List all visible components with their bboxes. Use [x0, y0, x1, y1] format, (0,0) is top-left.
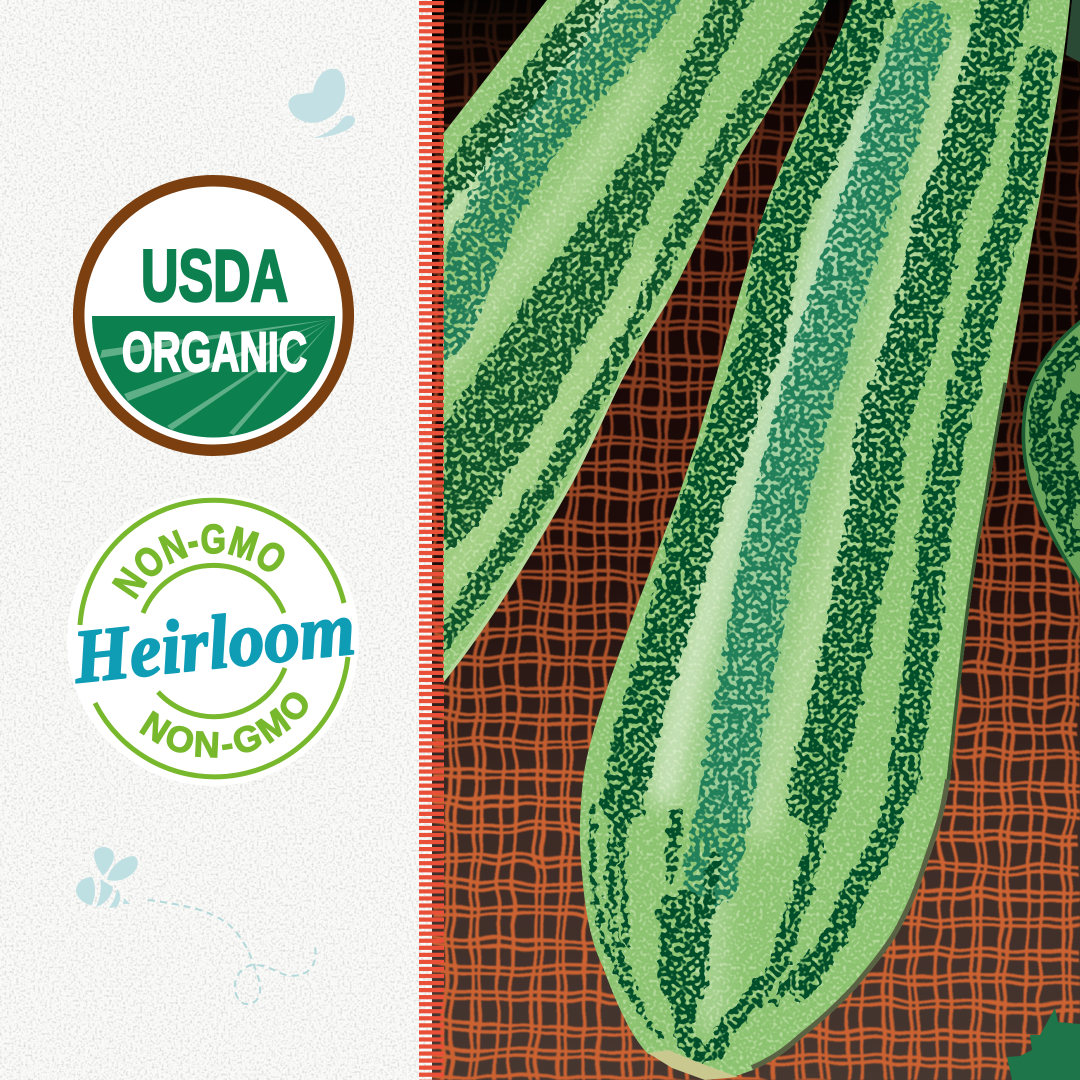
thin left-edge strands — [612, 780, 640, 1007]
stripe D — [903, 60, 1040, 780]
pale body highlights — [665, 40, 960, 1020]
left zucchini dark stripes — [443, 0, 838, 655]
dashed flight path — [148, 900, 316, 1004]
NON-GMO bottom text: NON-GMO — [139, 692, 308, 758]
Heirloom script: Heirloom — [69, 587, 359, 700]
stripe A — [622, 0, 873, 800]
NON-GMO top text: NON-GMO — [112, 524, 285, 600]
dark mottled stripes — [592, 0, 1040, 1053]
photo: burlap background — [432, 0, 1080, 1080]
stripe C — [813, 0, 1007, 800]
USDA wordmark: USDA — [141, 236, 288, 317]
badge white halo — [67, 494, 359, 786]
photo: left zucchini — [443, 0, 828, 683]
teal centre stripe — [710, 30, 925, 880]
badge: USDA Organic — [79, 181, 348, 450]
panel: white linen background — [0, 0, 432, 1080]
icon: butterfly — [289, 69, 355, 138]
seal ring — [79, 181, 348, 450]
red perforated stripe border — [419, 0, 444, 1080]
bee — [76, 847, 138, 908]
ORGANIC wordmark: ORGANIC — [122, 320, 307, 383]
photo: leaf corner — [1007, 1008, 1080, 1080]
left zucchini pale highlights — [443, 0, 650, 585]
green field — [92, 316, 335, 438]
field rays — [100, 319, 333, 435]
photo: main zucchini — [570, 0, 1080, 1080]
icon: bee with dashed flight path — [76, 847, 316, 1004]
outer arcs — [80, 500, 348, 777]
badge: Heirloom Non-GMO — [67, 494, 359, 786]
photo: right edge zucchini — [1022, 320, 1080, 585]
photo: zucchini stem tip — [648, 1050, 738, 1080]
photo: top-right dark zucchini sliver — [1066, 0, 1080, 62]
bottom patch E — [670, 813, 677, 880]
lower-right shaded edge — [753, 780, 950, 1070]
left zucchini teal stripe — [443, 0, 657, 330]
